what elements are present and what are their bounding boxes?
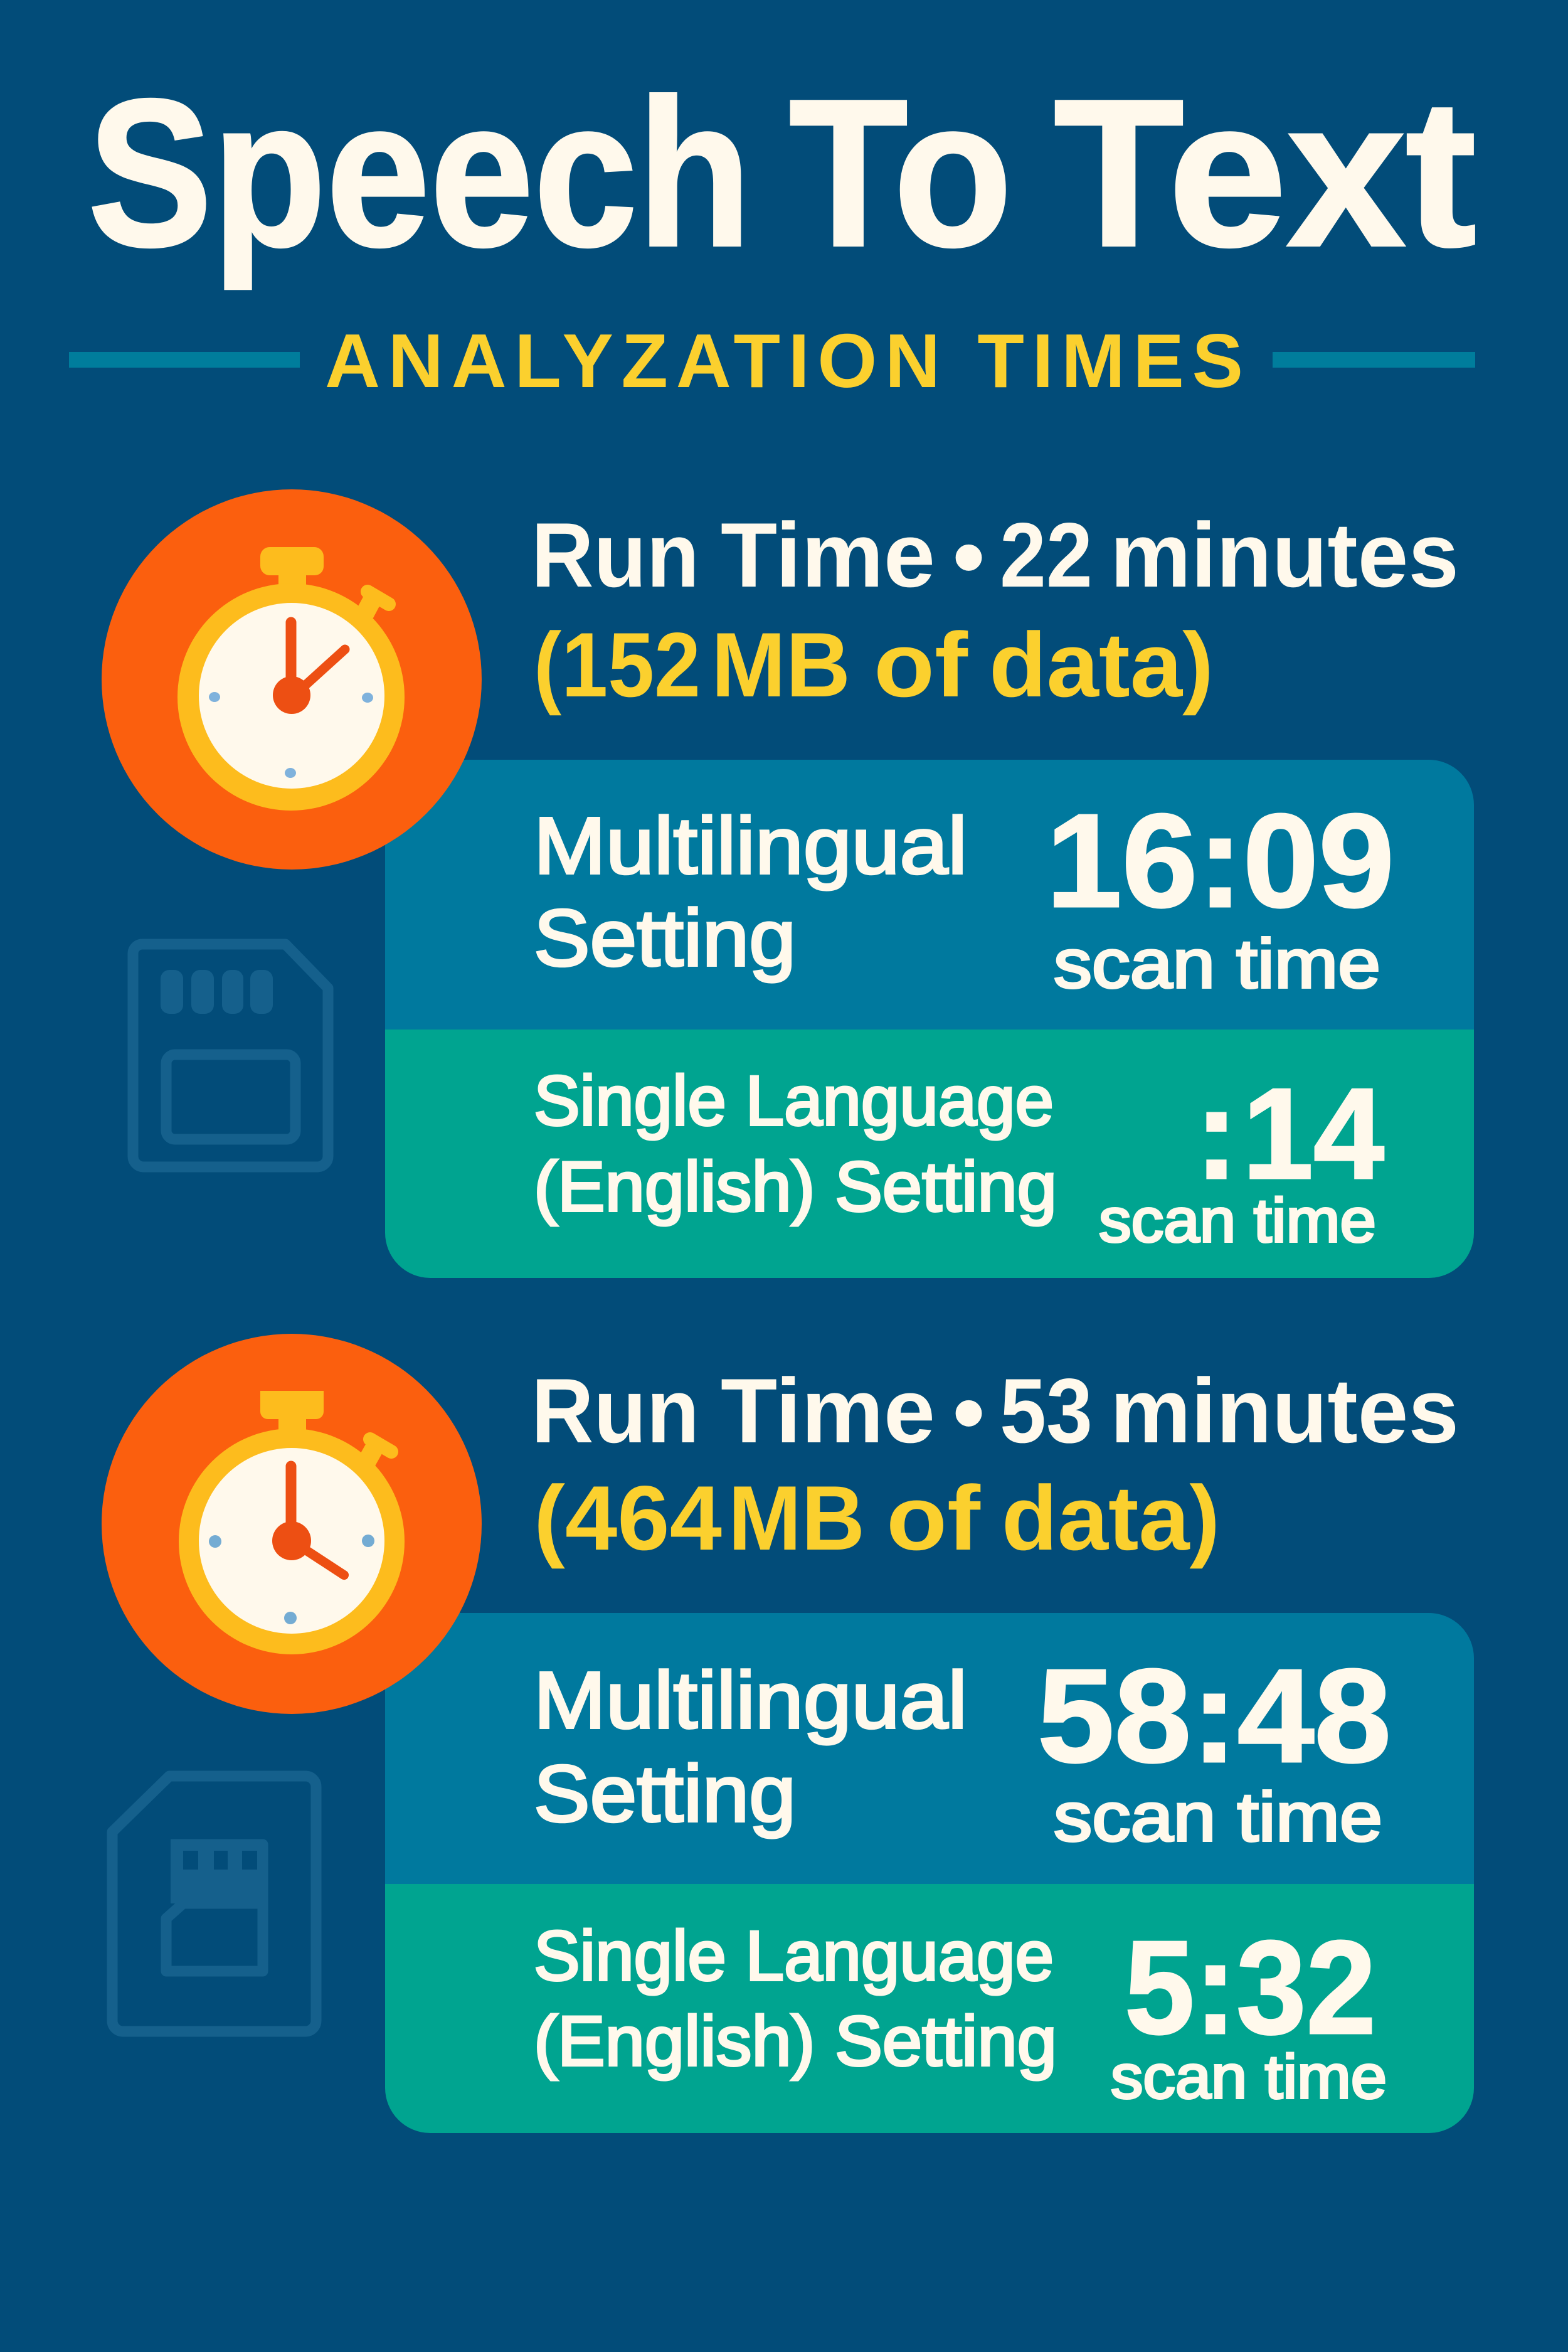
data size xyxy=(534,614,1214,716)
data size: (464 xyxy=(534,1467,722,1569)
icon: sd card xyxy=(133,944,328,1167)
single language value: : xyxy=(1195,1062,1238,1206)
run time heading: minutes xyxy=(1110,504,1459,606)
run time heading: 22 xyxy=(1000,504,1093,606)
results panel xyxy=(385,760,1474,1278)
single language scan time: scan time xyxy=(1111,2042,1387,2111)
title: Speech xyxy=(88,56,751,291)
data size: of xyxy=(886,1467,980,1569)
multilingual row background xyxy=(385,760,1474,1030)
multilingual scan time: scan time xyxy=(1054,1779,1382,1856)
results panel xyxy=(385,1613,1474,2133)
run time heading: minutes xyxy=(1110,1360,1459,1462)
subtitle rule left xyxy=(69,352,300,368)
data size xyxy=(534,1467,1220,1569)
run time heading: Time xyxy=(721,1360,935,1462)
multilingual label: Multilingual xyxy=(534,801,967,891)
run time heading xyxy=(531,504,1459,607)
single language label: Single Language xyxy=(534,1062,1054,1140)
multilingual label: Multilingual xyxy=(534,1656,967,1745)
run time heading: • xyxy=(953,1361,985,1463)
single language label: Single Language xyxy=(534,1917,1054,1995)
multilingual value: 16:09 xyxy=(1046,786,1394,935)
subtitle rule right xyxy=(1273,352,1475,368)
section: run time 53 minutes: (English) Setting xyxy=(534,2002,1057,2080)
run time heading xyxy=(531,1360,1459,1463)
multilingual value: 58:48 xyxy=(1037,1641,1391,1790)
run time heading: Time xyxy=(721,504,935,606)
multilingual scan time: scan time xyxy=(1054,925,1380,1003)
section: run time 22 minutes: (English) Setting xyxy=(534,1147,1057,1226)
section: run time 22 minutes: Setting xyxy=(534,893,796,983)
data size: data) xyxy=(1002,1467,1220,1569)
header xyxy=(69,56,1476,403)
multilingual row background xyxy=(385,1613,1474,1884)
title: To xyxy=(789,56,1012,290)
data size: MB xyxy=(711,614,850,716)
icon: micro sd card xyxy=(112,1776,316,2031)
run time heading: 53 xyxy=(1000,1360,1093,1462)
section: run time 53 minutes xyxy=(102,1334,1474,2133)
data size: of xyxy=(874,614,968,716)
data size: (152 xyxy=(534,614,701,716)
icon: stopwatch xyxy=(102,489,482,870)
run time heading: Run xyxy=(531,504,699,606)
single language value: 5:32 xyxy=(1125,1913,1376,2062)
subtitle: ANALYZATION TIMES xyxy=(325,318,1243,403)
data size: data) xyxy=(989,614,1214,716)
data size: MB xyxy=(728,1467,865,1569)
section: run time 22 minutes xyxy=(102,489,1474,1278)
title xyxy=(88,56,1476,291)
run time heading: Run xyxy=(531,1360,699,1462)
title: Text xyxy=(1054,56,1476,290)
single language scan time: scan time xyxy=(1099,1186,1376,1255)
single language row background xyxy=(385,1884,1474,2133)
single language row background xyxy=(385,1030,1474,1278)
single language value: 14 xyxy=(1242,1062,1384,1206)
section: run time 53 minutes: Setting xyxy=(534,1749,796,1839)
run time heading: • xyxy=(953,505,985,607)
icon: stopwatch xyxy=(102,1334,482,1714)
